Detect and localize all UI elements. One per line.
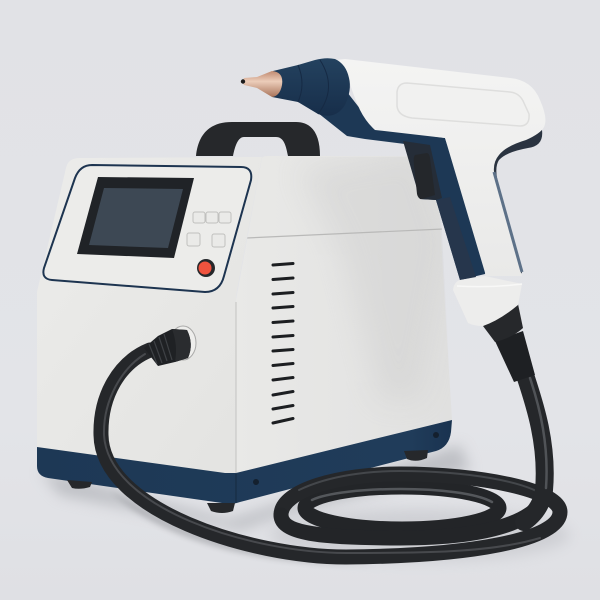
collar	[483, 304, 523, 342]
screen display	[89, 188, 183, 248]
white body	[336, 59, 545, 276]
main cable run	[101, 350, 560, 557]
lower coil strand	[281, 505, 540, 538]
grip boot	[453, 276, 522, 326]
inner coil loop	[305, 487, 499, 529]
cable connector	[144, 329, 191, 366]
screen	[77, 177, 194, 258]
lower grip shading	[436, 197, 476, 280]
grip back dark stripe	[480, 130, 542, 276]
strain relief	[495, 331, 535, 382]
tip opening	[241, 79, 245, 84]
ventilation slots	[273, 264, 293, 423]
grip back edge	[494, 172, 522, 272]
recessed grip panel	[397, 83, 529, 126]
laser gun	[241, 58, 545, 382]
control panel outline	[43, 165, 251, 292]
corner seam	[235, 302, 237, 474]
keypad buttons	[187, 212, 231, 247]
screen bezel	[77, 177, 194, 258]
product illustration	[37, 58, 569, 568]
floor shadows	[40, 445, 570, 566]
coiled cable	[101, 350, 560, 557]
gun cable	[524, 375, 547, 522]
machine body	[37, 150, 452, 504]
copper tip	[242, 71, 282, 97]
gun shadow on side panel	[247, 168, 442, 382]
side panel	[236, 156, 452, 473]
front face	[37, 157, 262, 476]
boot seam	[457, 284, 522, 287]
red power button	[197, 259, 215, 277]
navy nozzle	[272, 58, 350, 116]
cable port ring	[170, 326, 196, 360]
machine feet	[67, 450, 428, 513]
navy neck and grip front	[318, 92, 487, 280]
carry handle	[196, 122, 320, 156]
trigger	[414, 153, 435, 199]
base screws	[253, 432, 439, 485]
navy base	[37, 420, 452, 504]
